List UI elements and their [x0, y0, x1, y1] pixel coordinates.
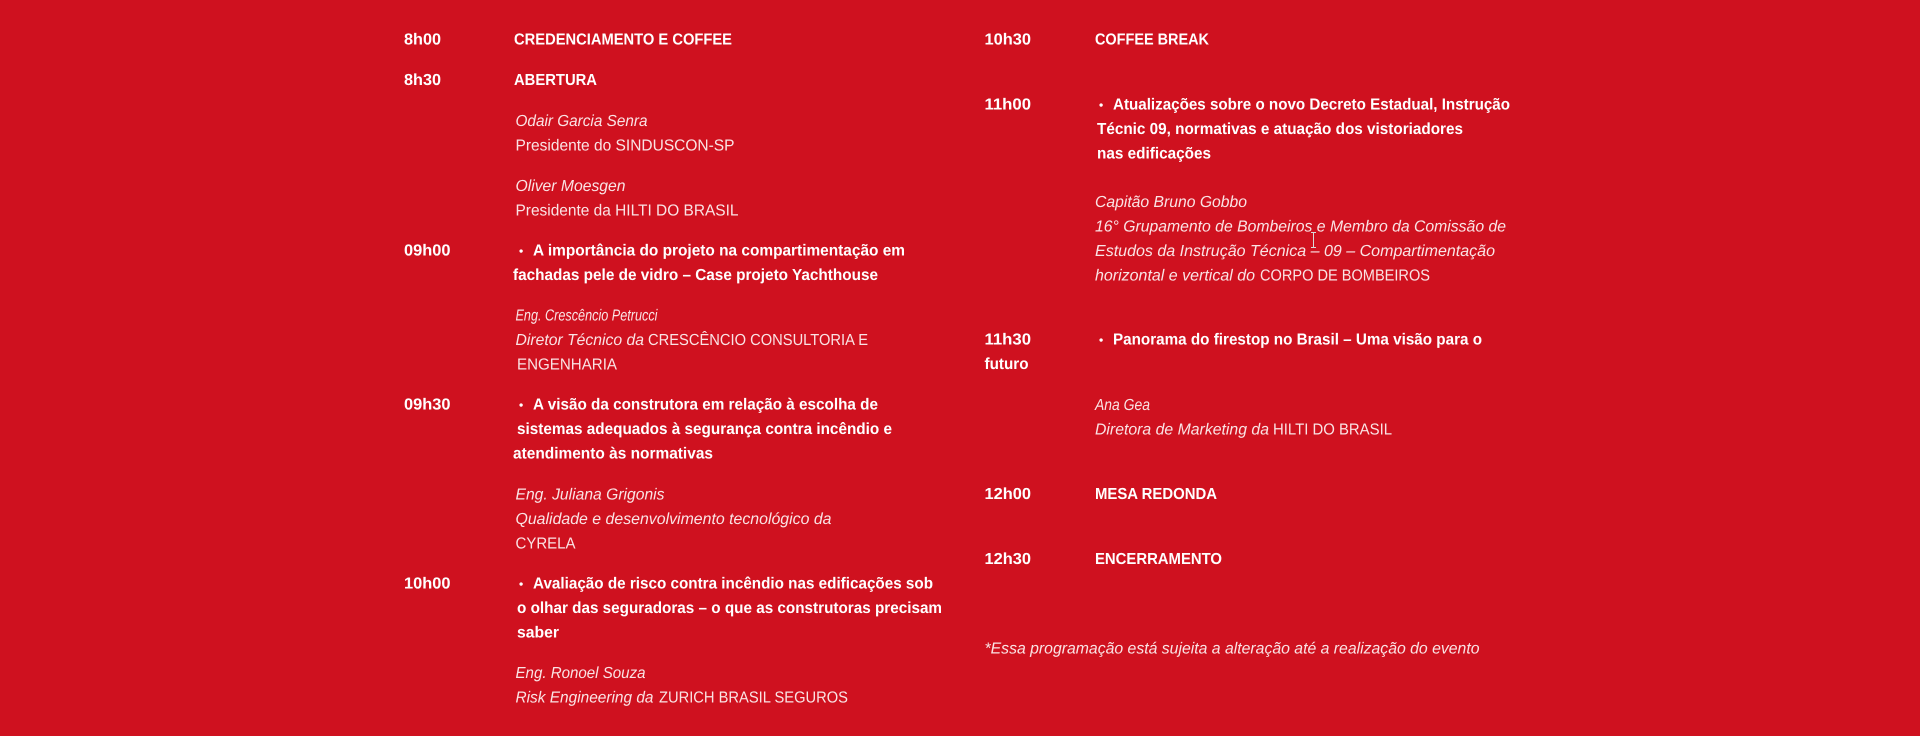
right column schedule	[984, 31, 1510, 658]
speaker: Ana Gea: Diretora de Marketing da	[1095, 422, 1269, 438]
speaker: Crescêncio Petrucci: Diretor Técnico da	[516, 332, 644, 349]
09h30 session: 09h30	[404, 396, 451, 413]
10h00 session: Avaliação de risco contra incêndio nas edificações sob	[533, 575, 933, 592]
09h00 session: •	[519, 244, 523, 258]
12h30 encerramento: 12h30	[984, 551, 1031, 568]
8h30 abertura: 8h30	[404, 72, 441, 89]
speaker: Odair Garcia Senra: Odair Garcia Senra	[516, 113, 648, 130]
speaker: Juliana Grigonis: CYRELA	[516, 536, 576, 552]
speaker: Ronoel Souza: Risk Engineering da	[516, 690, 654, 706]
speaker: Oliver Moesgen: Presidente da HILTI DO BRASIL	[516, 202, 739, 220]
09h00 session: A importância do projeto na compartimentação em	[533, 242, 905, 259]
09h30 session: sistemas adequados à segurança contra incêndio e	[517, 421, 892, 438]
11h00 session	[984, 96, 1510, 162]
12h00 mesa redonda	[984, 486, 1217, 503]
icon: text cursor	[1311, 232, 1316, 248]
09h00 session: fachadas pele de vidro – Case projeto Yachthouse	[513, 267, 878, 284]
speaker: Ana Gea: Ana Gea	[1094, 397, 1150, 414]
speaker: Ana Gea: HILTI DO BRASIL	[1273, 422, 1392, 438]
10h00 session: saber	[517, 624, 559, 641]
10h00 session	[404, 575, 942, 641]
speaker: Crescêncio Petrucci: ENGENHARIA	[517, 356, 617, 374]
8h00 credenciamento: CREDENCIAMENTO E COFFEE	[514, 31, 732, 48]
11h30 session: futuro	[984, 356, 1029, 373]
speaker: Odair Garcia Senra: Presidente do SINDUSCON-SP	[516, 138, 734, 154]
10h30 coffee break	[984, 31, 1209, 48]
11h00 session: nas edificações	[1097, 145, 1211, 162]
12h00 mesa redonda: MESA REDONDA	[1095, 486, 1217, 503]
12h30 encerramento: ENCERRAMENTO	[1095, 551, 1222, 568]
10h00 session: o olhar das seguradoras – o que as construtoras precisam	[517, 600, 942, 617]
11h00 session: •	[1099, 98, 1103, 112]
11h00 session: Técnic 09, normativas e atuação dos vistoriadores	[1097, 121, 1463, 138]
11h30 session: Panorama do firestop no Brasil – Uma visão para o	[1113, 331, 1482, 348]
speaker: Capitão Bruno Gobbo: 16° Grupamento de Bombeiros e Membro da Comissão de	[1095, 218, 1506, 236]
09h00 session: 09h00	[404, 242, 451, 259]
8h30 abertura	[404, 72, 597, 89]
09h30 session	[404, 396, 892, 462]
speaker: Crescêncio Petrucci: Eng. Crescêncio Petrucci	[516, 308, 658, 324]
10h30 coffee break: COFFEE BREAK	[1095, 31, 1209, 48]
09h30 session: •	[519, 398, 523, 412]
speaker: Odair Garcia Senra	[516, 113, 734, 154]
speaker: Juliana Grigonis: Eng. Juliana Grigonis	[516, 486, 664, 504]
09h30 session: A visão da construtora em relação à escolha de	[533, 396, 878, 413]
speaker: Oliver Moesgen: Oliver Moesgen	[516, 178, 626, 195]
11h00 session: 11h00	[984, 96, 1031, 113]
10h30 coffee break: 10h30	[984, 31, 1031, 48]
speaker: Crescêncio Petrucci: CRESCÊNCIO CONSULTORIA E	[648, 331, 868, 349]
11h30 session: •	[1099, 333, 1103, 347]
speaker: Capitão Bruno Gobbo: CORPO DE BOMBEIROS	[1260, 268, 1430, 284]
8h00 credenciamento: 8h00	[404, 31, 441, 48]
8h30 abertura: ABERTURA	[514, 72, 597, 89]
speaker: Capitão Bruno Gobbo: Estudos da Instrução Técnica – 09 – Compartimentação	[1095, 243, 1495, 260]
speaker: Capitão Bruno Gobbo: Capitão Bruno Gobbo	[1095, 194, 1247, 211]
speaker: Capitão Bruno Gobbo: horizontal e vertical do	[1095, 268, 1255, 284]
speaker: Crescêncio Petrucci	[516, 308, 868, 374]
12h30 encerramento	[984, 551, 1222, 568]
8h00 credenciamento	[404, 31, 732, 48]
10h00 session: •	[519, 577, 523, 591]
speaker: Oliver Moesgen	[516, 178, 739, 220]
11h30 session	[984, 331, 1482, 373]
speaker: Ronoel Souza	[516, 665, 848, 706]
speaker: Ronoel Souza: ZURICH BRASIL SEGUROS	[659, 690, 848, 706]
11h00 session: Atualizações sobre o novo Decreto Estadual, Instrução	[1113, 96, 1510, 113]
speaker: Juliana Grigonis	[516, 486, 832, 552]
12h00 mesa redonda: 12h00	[984, 486, 1031, 503]
10h00 session: 10h00	[404, 575, 451, 592]
11h30 session: 11h30	[984, 331, 1031, 348]
speaker: Ana Gea	[1094, 397, 1392, 438]
speaker: Ronoel Souza: Eng. Ronoel Souza	[516, 665, 646, 682]
footnote: *Essa programação está sujeita a alteração até a realização do evento	[984, 640, 1480, 658]
09h00 session	[404, 242, 905, 284]
speaker: Capitão Bruno Gobbo	[1095, 194, 1506, 284]
left column schedule	[404, 31, 942, 707]
speaker: Juliana Grigonis: Qualidade e desenvolvimento tecnológico da	[516, 511, 832, 528]
09h30 session: atendimento às normativas	[513, 445, 713, 462]
